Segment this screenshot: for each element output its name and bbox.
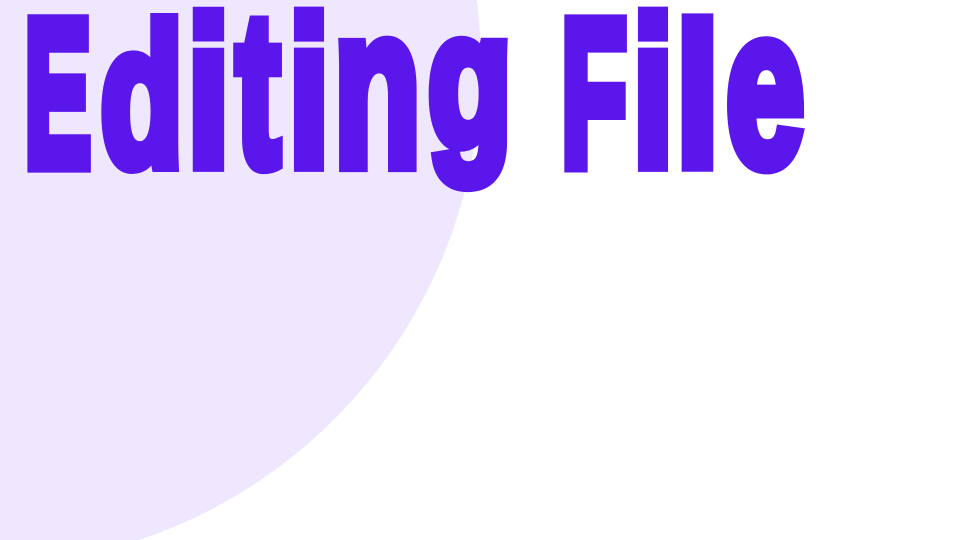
title bbox=[24, 0, 804, 214]
background circle bbox=[0, 0, 481, 540]
